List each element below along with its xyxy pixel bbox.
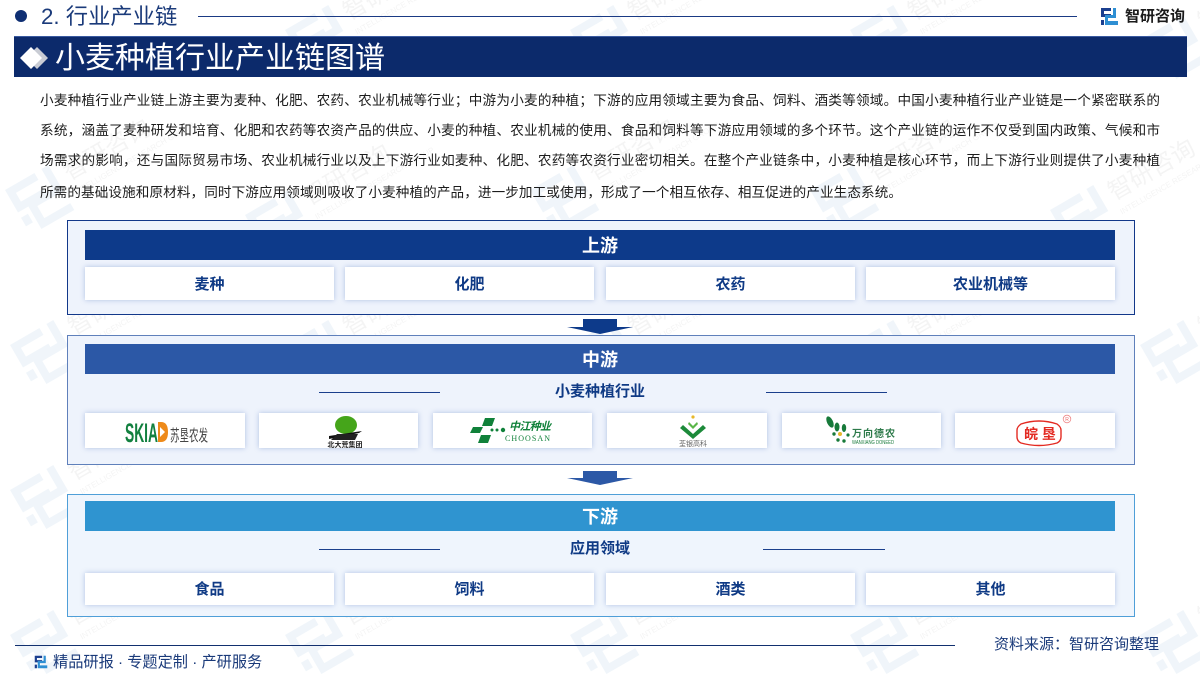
logo: SKIAD [85,413,245,448]
source note: 资料来源：智研咨询整理 [994,636,1159,653]
intro paragraph: 小麦种植行业产业链上游主要为麦种、化肥、农药、农业机械等行业；中游为小麦的种植；下游的应用领域主要为食品、饲料、酒类等领域。中国小麦种植行业产业链是一个紧密联系的 [40,93,1160,108]
logo: Wanxiang Denong: WANXIANG DONEED [852,440,894,446]
downstream subtitle: 应用领域 [570,540,630,557]
arrow: midstream to downstream [567,471,633,485]
midstream subtitle: 小麦种植行业 [555,383,645,400]
panel: downstream [67,494,1135,617]
logo: Wankan: R [1065,417,1069,423]
section heading: 2. 行业产业链 [41,4,177,29]
footer rule [15,645,955,646]
panel: downstream: 酒类 [715,581,746,598]
upstream items [85,267,334,300]
logo: Wanxiang Denong: 万向德农 [852,427,896,440]
logo: SKIAD: SKIA [125,418,158,448]
panel: upstream: 化肥 [454,276,484,293]
downstream header: 下游 [582,507,618,527]
logo: Choosan: CHOOSAN [505,434,550,443]
downstream header [85,501,1115,531]
panel: midstream [67,335,1135,465]
panel: upstream [67,220,1135,315]
panel: downstream: 饲料 [454,581,484,598]
intro paragraph: 所需的基础设施和原材料，同时下游应用领域则吸收了小麦种植的产品，进一步加工或使用，形成了一个相互依存、相互促进的产业生态系统。 [40,185,902,200]
upstream header: 上游 [582,236,618,256]
logo: green V: 荃银高科 [679,439,707,448]
midstream header [85,344,1115,374]
logo: Wanxiang Denong [782,413,941,448]
panel: upstream: 农药 [715,276,746,293]
intro paragraph: 系统，涵盖了麦种研发和培育、化肥和农药等农资产品的供应、小麦的种植、农业机械的使用、食品和饲料等下游应用领域的多个环节。这个产业链的运作不仅受到国内政策、气候和市 [40,123,1160,138]
panel: upstream: 农业机械等 [953,276,1028,293]
logo: Choosan [433,413,592,448]
title text: 小麦种植行业产业链图谱 [55,42,385,75]
arrow: upstream to midstream [567,319,633,334]
logo: SKIAD: 苏垦农发 [170,427,208,445]
logo: Beidahuang [259,413,418,448]
brand logo: 智研咨询 [1125,8,1185,25]
upstream items: 麦种 [194,276,224,293]
midstream header: 中游 [582,350,618,370]
logo: Choosan: 中江种业 [509,420,552,433]
logo: Wankan: 皖 垦 [1024,426,1056,442]
footer slogan: 精品研报 · 专题定制 · 产研服务 [53,654,262,671]
intro paragraph: 场需求的影响，还与国际贸易市场、农业机械行业以及上下游行业如麦种、化肥、农药等农资行业密切相关。在整个产业链条中，小麦种植是核心环节，而上下游行业则提供了小麦种植 [40,153,1160,168]
panel: downstream: 其他 [975,581,1006,598]
logo: green V [607,413,767,448]
logo: Wankan [955,413,1115,448]
title banner [14,36,1187,77]
intro paragraph [40,93,1160,200]
icon: double diamond [20,47,48,69]
upstream header [85,230,1115,260]
downstream items [85,573,334,605]
header rule [198,16,1077,17]
downstream items: 食品 [194,581,224,598]
